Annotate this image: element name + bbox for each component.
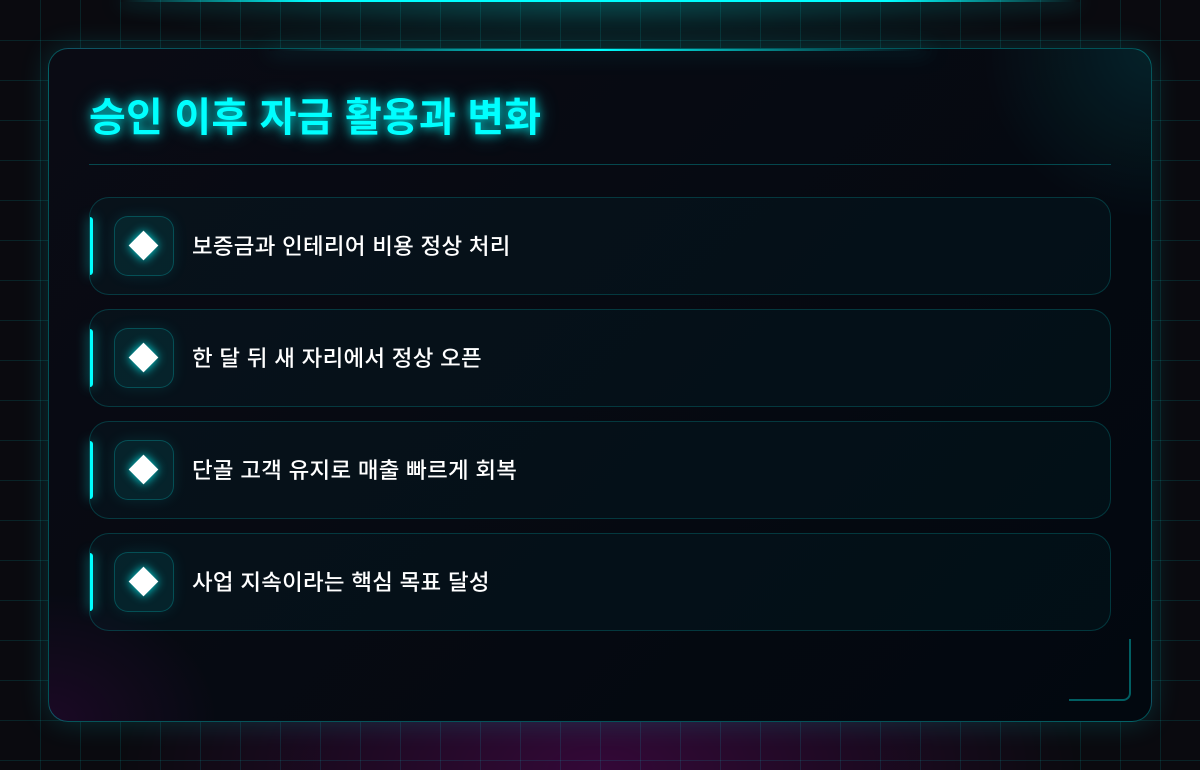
item text 2: 한 달 뒤 새 자리에서 정상 오픈 bbox=[192, 346, 482, 371]
list item 3 bbox=[89, 421, 1111, 519]
accent bar 1 bbox=[90, 217, 93, 275]
accent bar 4 bbox=[90, 553, 93, 611]
icon: diamond 1 bbox=[114, 216, 174, 276]
accent bar 3 bbox=[90, 441, 93, 499]
corner bracket bbox=[1069, 639, 1131, 701]
icon: diamond 2 bbox=[114, 328, 174, 388]
item text 4: 사업 지속이라는 핵심 목표 달성 bbox=[192, 570, 490, 595]
top glow bar bbox=[120, 0, 1080, 2]
item text 3: 단골 고객 유지로 매출 빠르게 회복 bbox=[192, 458, 517, 483]
list item 1 bbox=[89, 197, 1111, 295]
card top glow line bbox=[269, 49, 930, 51]
title: 승인 이후 자금 활용과 변화 bbox=[89, 96, 541, 140]
icon: diamond 4 bbox=[114, 552, 174, 612]
list item 4 bbox=[89, 533, 1111, 631]
accent bar 2 bbox=[90, 329, 93, 387]
item text 1: 보증금과 인테리어 비용 정상 처리 bbox=[192, 234, 511, 259]
icon: diamond 3 bbox=[114, 440, 174, 500]
title bbox=[89, 89, 1111, 165]
list item 2 bbox=[89, 309, 1111, 407]
